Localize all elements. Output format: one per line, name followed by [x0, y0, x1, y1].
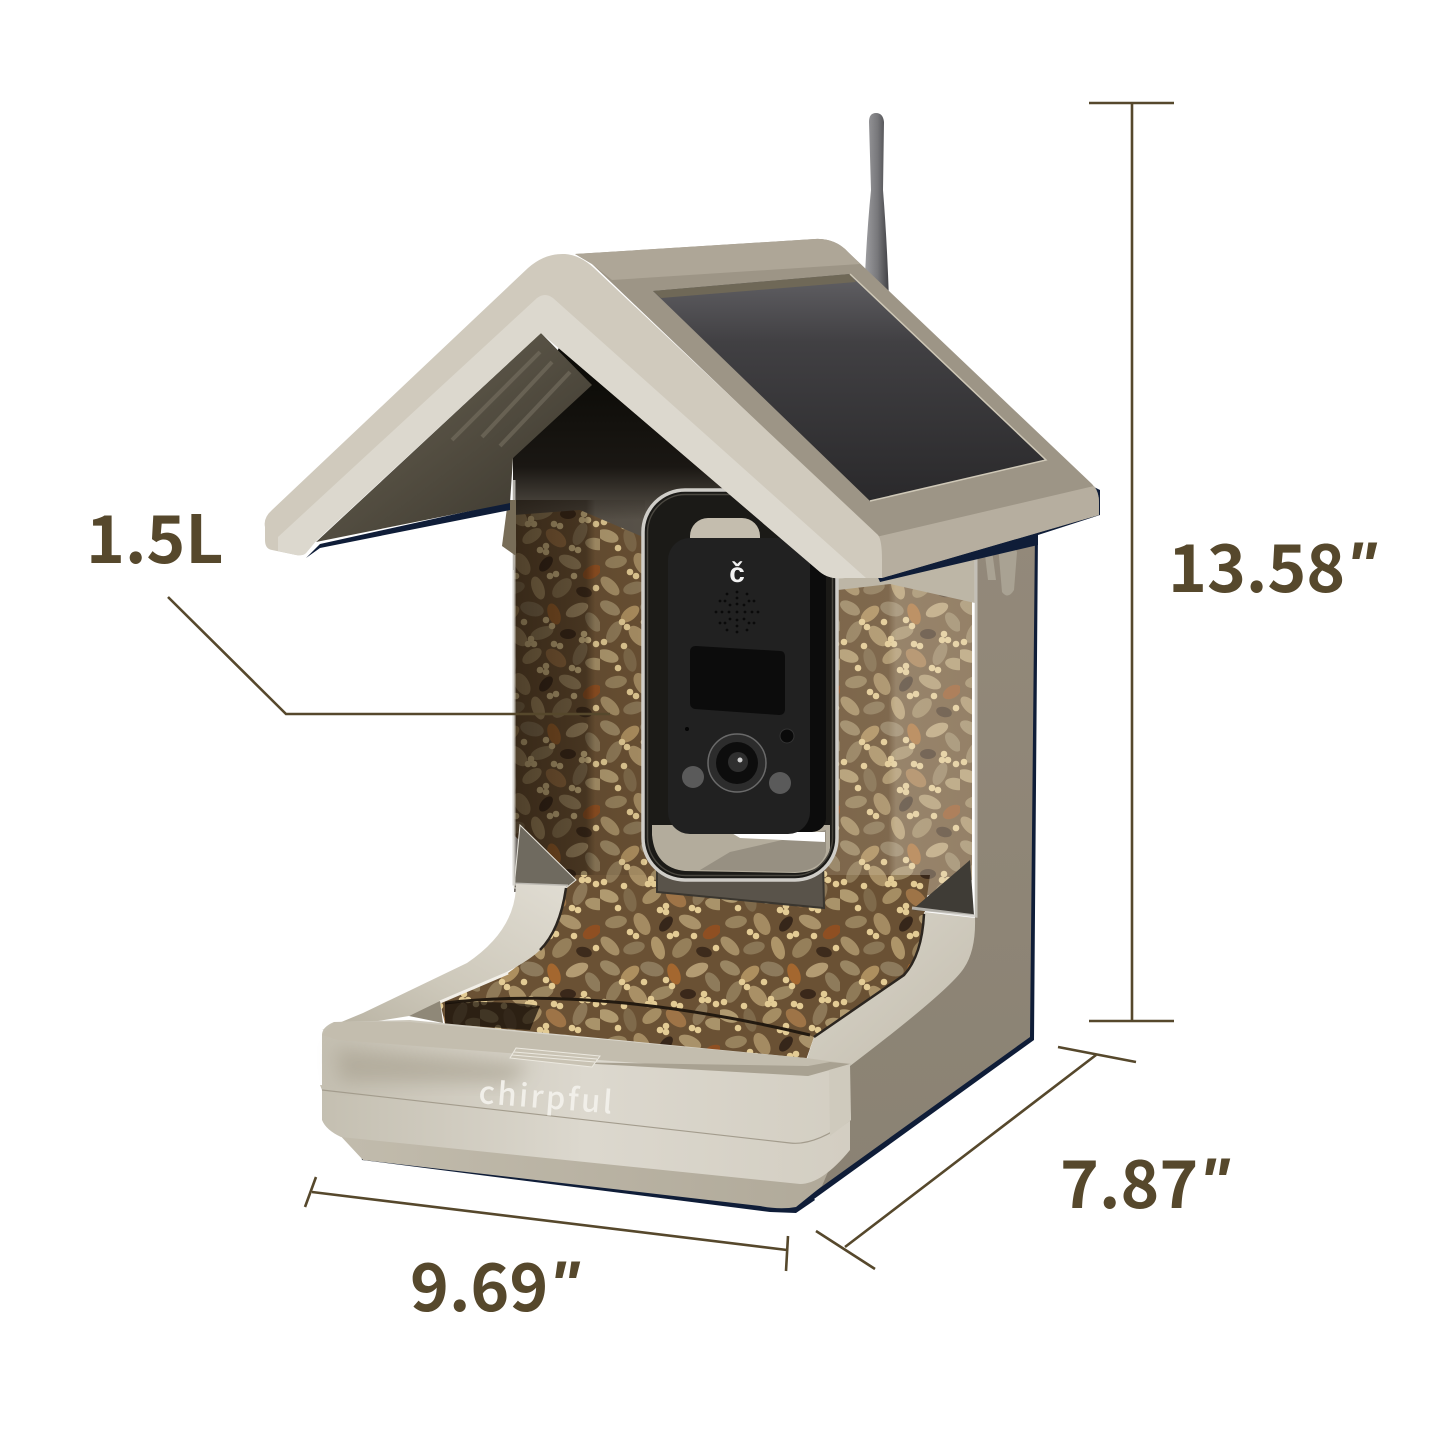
- roof front fascia: [265, 254, 882, 578]
- brand wordmark: chirpful: [477, 1067, 617, 1123]
- roof shadow: [270, 485, 1100, 582]
- camera indicators: [682, 766, 704, 788]
- hopper corner brace right: [912, 860, 974, 915]
- roof underside: [316, 333, 592, 542]
- base front band: [320, 1085, 850, 1184]
- left chute arm: [322, 884, 566, 1030]
- callout: capacity 1.5L: 1.5L: [86, 487, 223, 583]
- dimension: height 13.58 in: ": [1345, 528, 1377, 602]
- dimension: width 9.69 in: [305, 1177, 788, 1331]
- hopper top interior: [513, 345, 840, 700]
- seeds: hopper right: [820, 582, 972, 905]
- chute seed tray rim: [445, 998, 810, 1035]
- clip latch: [985, 542, 1017, 596]
- camera unit: [668, 518, 826, 834]
- roof lower lip: [876, 486, 1099, 578]
- dimension: width 9.69 in: ": [548, 1247, 580, 1321]
- roof right slope: [575, 239, 1099, 578]
- callout: capacity 1.5L: [86, 487, 610, 714]
- right chute arm: [806, 912, 975, 1066]
- dimension: depth 7.87 in: ": [1198, 1144, 1230, 1218]
- camera logo: č: [729, 557, 745, 588]
- base bottom shadow: [360, 1150, 815, 1213]
- seeds: lower chute: [440, 875, 930, 1060]
- icon: antenna: [864, 113, 889, 300]
- dimension: width 9.69 in: 9.69: [410, 1235, 548, 1331]
- panel: feeder illustration: [265, 239, 1100, 1213]
- tray floor shadow: [409, 1001, 443, 1023]
- camera speaker grille: [715, 591, 759, 633]
- base ridged button: [510, 1048, 600, 1067]
- dimension: depth 7.87 in: 7.87: [1060, 1132, 1198, 1228]
- camera display window: [690, 646, 785, 715]
- feeder side body: [760, 530, 1038, 1212]
- hopper right upper wall: [838, 552, 975, 603]
- seeds: hopper left: [514, 500, 660, 892]
- camera lens: [708, 734, 766, 792]
- dimension: depth 7.87 in: [816, 1047, 1230, 1269]
- dimension: height 13.58 in: 13.58: [1168, 516, 1345, 612]
- solar panel: [653, 274, 1046, 501]
- base lid: [322, 1020, 851, 1144]
- chute window edges: [540, 888, 924, 1037]
- dimension: height 13.58 in: [1089, 103, 1377, 1021]
- camera frame: [643, 490, 837, 908]
- hopper corner brace left: [514, 825, 576, 888]
- hopper glass frame: [514, 480, 976, 916]
- base lower section: [322, 1080, 850, 1208]
